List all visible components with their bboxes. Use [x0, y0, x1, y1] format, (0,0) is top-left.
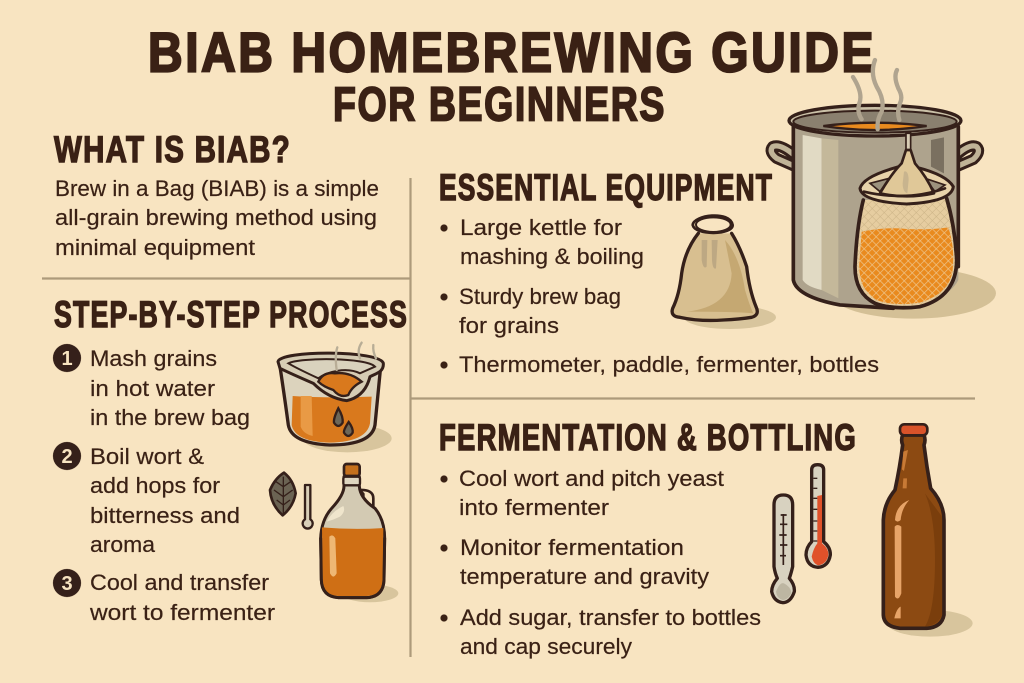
- list: equipment items: mashing & boiling: [460, 244, 644, 269]
- heading: essential equipment: ESSENTIAL EQUIPMENT: [439, 167, 773, 208]
- list: equipment items: Sturdy brew bag: [459, 284, 621, 309]
- panel: fermentation and bottling: [439, 417, 857, 659]
- step 2: [53, 442, 240, 557]
- list: fermentation items: into fermenter: [459, 495, 610, 520]
- step 3: 3: [61, 573, 73, 595]
- panel: step-by-step process: [53, 294, 408, 625]
- list: fermentation items: Monitor fermentation: [460, 535, 684, 560]
- heading: fermentation and bottling: FERMENTATION & BOTTLING: [439, 417, 857, 458]
- text block: BIAB description: [55, 176, 379, 260]
- step 1: in hot water: [90, 376, 216, 401]
- icon: hydrometer: [772, 495, 794, 603]
- step 1: [53, 344, 250, 430]
- heading: step-by-step process: STEP-BY-STEP PROCESS: [54, 294, 408, 335]
- step 3: Cool and transfer: [90, 570, 270, 595]
- list: fermentation items: and cap securely: [460, 634, 633, 659]
- step 2: aroma: [90, 532, 155, 557]
- list: fermentation items: temperature and gravity: [460, 564, 710, 589]
- icon: hop leaf: [270, 473, 296, 515]
- step 2: 2: [61, 446, 73, 468]
- pot shadow: [831, 268, 996, 319]
- text block: BIAB description: minimal equipment: [55, 235, 256, 260]
- list: fermentation items: Add sugar, transfer to bottles: [460, 605, 761, 630]
- icon: small paddle: [303, 485, 313, 529]
- step 1: Mash grains: [90, 346, 217, 371]
- step 2: bitterness and: [90, 503, 240, 528]
- list: equipment items: Large kettle for: [460, 215, 623, 240]
- step 1: 1: [61, 348, 73, 370]
- step 3: wort to fermenter: [89, 600, 276, 625]
- icon: red thermometer: [806, 465, 830, 567]
- bag hook: [906, 133, 911, 151]
- list: fermentation items: Cool wort and pitch yeast: [459, 466, 725, 491]
- icon: stock pot with brew bag: [771, 60, 996, 319]
- icon: fermenter jug: [321, 464, 398, 602]
- panel: essential equipment: [439, 167, 879, 377]
- step 3: [53, 569, 276, 625]
- text block: BIAB description: all-grain brewing method using: [55, 205, 377, 230]
- step 1: in the brew bag: [90, 405, 250, 430]
- list: fermentation items: [440, 466, 761, 659]
- title: BIAB HOMEBREWING GUIDE: [148, 20, 876, 84]
- step 2: Boil wort &: [90, 444, 204, 469]
- steam: [853, 60, 901, 129]
- pot rim: [789, 105, 961, 136]
- list: equipment items: Thermometer, paddle, fermenter, bottles: [459, 352, 879, 377]
- heading: what is BIAB: WHAT IS BIAB?: [54, 129, 291, 170]
- panel: what is BIAB: [54, 129, 379, 260]
- list: equipment items: for grains: [459, 313, 559, 338]
- icon: empty brew bag: [672, 216, 776, 329]
- text block: BIAB description: Brew in a Bag (BIAB) is a simple: [55, 176, 379, 201]
- pot body: [793, 127, 958, 308]
- title: FOR BEGINNERS: [333, 78, 666, 132]
- title: [148, 20, 876, 132]
- pot handles: [771, 146, 979, 167]
- list: equipment items: [440, 215, 879, 377]
- step 2: add hops for: [90, 473, 221, 498]
- icon: beer bottle: [883, 424, 973, 637]
- brew bag: [855, 198, 957, 308]
- icon: mash pot with grain bag: [278, 343, 392, 452]
